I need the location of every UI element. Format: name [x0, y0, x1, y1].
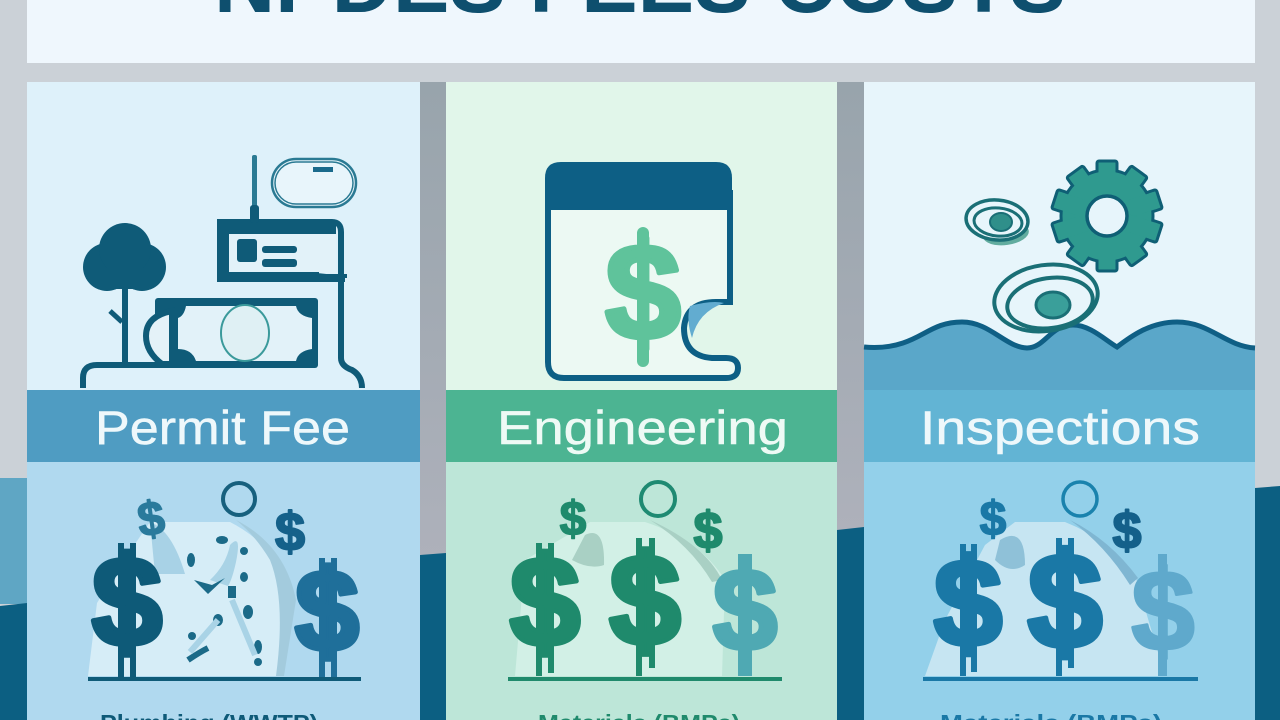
icon: large dollar sign 3: $ — [1131, 548, 1195, 675]
icon: gear — [1052, 161, 1162, 271]
label band: Inspections — [864, 390, 1255, 462]
icon: ring — [1063, 482, 1097, 516]
icon: green dollar sign: $ — [605, 216, 681, 368]
icon: small dollar sign right: $ — [275, 502, 305, 562]
icon: small dollar sign right: $ — [694, 502, 723, 560]
icon: running figure — [187, 536, 262, 666]
icon: wave — [864, 322, 1255, 390]
icon: permit device, tree and banknote — [83, 155, 362, 388]
icon: small dollar sign left: $ — [134, 491, 168, 548]
icon: large dollar sign 1: $ — [509, 531, 581, 674]
icon: tree — [83, 223, 166, 365]
icon: large dollar sign right: $ — [295, 546, 359, 676]
icon: pill badge — [272, 159, 356, 207]
icon: ring — [641, 482, 675, 516]
icon: large ripple eye — [990, 258, 1102, 338]
label band: Engineering — [446, 390, 837, 462]
icon: small dollar sign left: $ — [980, 493, 1007, 546]
label band: Permit Fee — [27, 390, 420, 462]
label band: Engineering: Engineering — [497, 401, 788, 454]
icon: large dollar sign 1: $ — [934, 535, 1002, 673]
icon: document with dollar — [545, 162, 738, 378]
label band: Inspections: Inspections — [920, 401, 1200, 454]
lower section: permit costs — [27, 462, 420, 720]
panel: engineering — [446, 82, 837, 720]
icon: large dollar sign left: $ — [91, 531, 163, 674]
label band: Permit Fee: Permit Fee — [95, 401, 350, 454]
icon: large dollar sign 3: $ — [713, 545, 777, 675]
icon: permit device — [217, 155, 362, 388]
icon: large dollar sign 2: $ — [609, 527, 681, 673]
icon: small dollar sign left: $ — [560, 493, 587, 546]
panel: permit fee — [27, 82, 420, 720]
icon: ring — [223, 483, 255, 515]
icon: banknote — [146, 298, 318, 368]
lower section: inspection costs — [864, 462, 1255, 720]
icon: small ripple eye — [964, 197, 1030, 248]
icon: large dollar sign 2: $ — [1027, 525, 1103, 677]
icon: small dollar sign right: $ — [1113, 502, 1142, 560]
lower section: materials costs — [446, 462, 837, 720]
panel: inspections — [864, 82, 1255, 720]
title header — [27, 0, 1255, 63]
